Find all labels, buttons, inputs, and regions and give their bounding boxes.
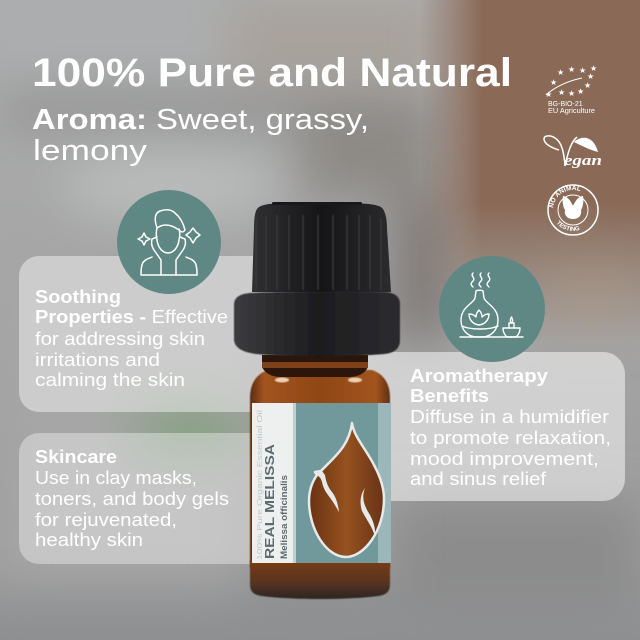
neck [262,355,368,377]
icon: face with towel circle [117,190,221,294]
badge: EU organic: ★ [579,66,586,75]
badge: vegan: egan [564,153,602,169]
panel: skincare card [19,433,319,564]
text: soothing properties: calming the skin [35,370,185,390]
bottle [234,202,400,599]
badge: no animal testing: NO ANIMAL [549,186,580,208]
text: skincare: Skincare [35,447,117,467]
text: skincare [35,447,229,550]
text: aromatherapy: mood improvement, [410,449,599,469]
badge: EU organic: ★ [545,90,552,99]
label: white strip [252,403,293,563]
text: soothing properties [35,287,228,390]
badge: EU organic: ★ [584,81,591,90]
text: aromatherapy [410,366,611,489]
cap: collar [234,291,400,356]
text: aromatherapy: and sinus relief [410,469,547,489]
badge: EU organic: ★ [577,87,584,96]
panel: soothing properties card [19,256,319,412]
label text [255,410,290,560]
label: teal [252,403,391,563]
label text: 100% Pure Organic Essential Oil [255,410,264,560]
text: soothing properties: Soothing [35,287,121,307]
text: skincare: healthy skin [35,530,143,550]
subtitle: aroma: Aroma: Sweet, grassy, [32,104,369,136]
text: skincare: for rejuvenated, [35,510,177,530]
text: aromatherapy: to promote relaxation, [410,428,611,448]
badge: EU organic [545,64,597,115]
subtitle: aroma [32,104,369,167]
icon: diffuser circle [439,256,545,362]
badge: EU organic: ★ [587,72,594,81]
highlights [275,378,362,382]
glass body [250,370,390,568]
subtitle: aroma: lemony [33,135,148,167]
drop logo [309,423,384,557]
badge: vegan [544,136,602,169]
text: skincare: Use in clay masks, [35,468,197,488]
text: aromatherapy: Aromatherapy [410,366,548,386]
cap: ribbed top [252,202,391,292]
label text: Melissa officinalis [279,475,290,559]
text: soothing properties: irritations and [35,350,160,370]
text: aromatherapy: Diffuse in a humidifier [410,407,609,427]
badge: EU organic: ★ [568,65,575,74]
badge: EU organic: ★ [557,68,564,77]
text: soothing properties: for addressing skin [35,329,205,349]
badge: EU organic: ★ [568,89,575,98]
badge: no animal testing [547,184,599,236]
badge: EU organic: BG-BIO-21 [548,101,583,108]
panel: aromatherapy card [330,352,625,501]
badge: no animal testing: TESTING [557,220,580,231]
title: 100% Pure and Natural [32,51,512,95]
badge: EU organic: ★ [590,64,597,73]
badge: EU organic: EU Agriculture [548,108,595,115]
glass base [250,560,390,599]
text: soothing properties: Properties - Effective [35,307,228,327]
text: aromatherapy: Benefits [410,386,489,406]
label text: REAL MELISSA [262,443,277,559]
text: skincare: toners, and body gels [35,489,229,509]
badge: EU organic: ★ [558,88,565,97]
badge: EU organic: ★ [550,78,557,87]
